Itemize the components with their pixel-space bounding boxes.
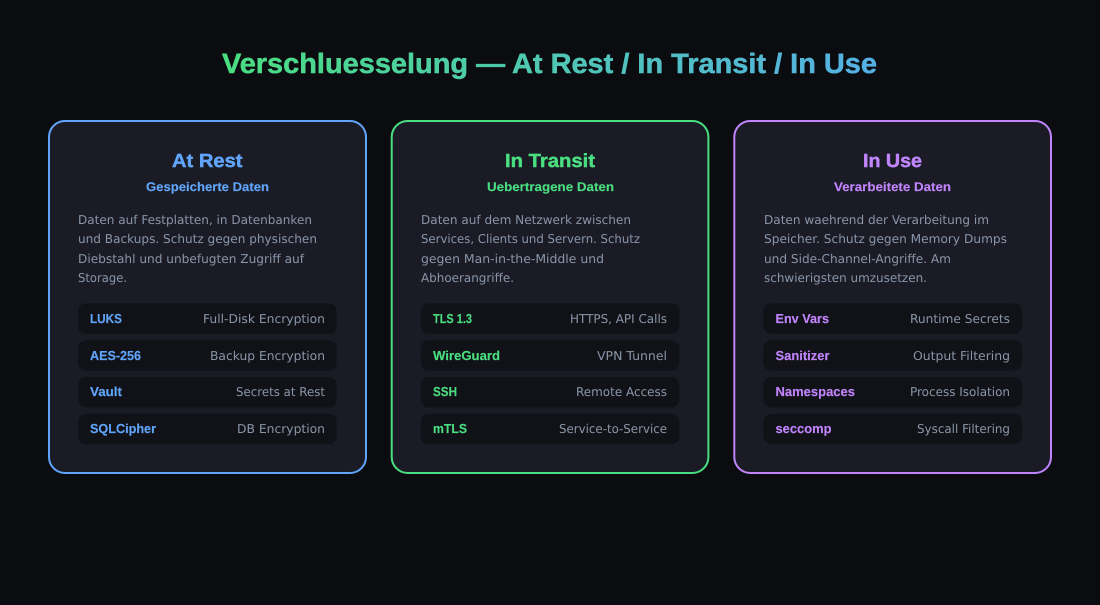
panel: In Transit — [392, 121, 708, 473]
row: Env Vars: Env Vars — [776, 311, 829, 326]
description: In Use: und Side-Channel-Angriffe. Am — [764, 252, 951, 266]
description: In Transit: Services, Clients und Servern. Schutz — [421, 232, 640, 246]
row: AES-256 — [78, 340, 337, 371]
row: seccomp — [763, 414, 1022, 444]
row: LUKS — [78, 303, 337, 334]
row: WireGuard — [421, 340, 679, 371]
row: mTLS: mTLS — [433, 421, 467, 436]
title: Verschluesselung — At Rest / In Transit / In Use — [222, 48, 877, 79]
description: At Rest: Storage. — [78, 271, 127, 285]
row: Sanitizer: Output Filtering — [913, 349, 1010, 363]
subheading: Gespeicherte Daten: Gespeicherte Daten — [146, 180, 269, 194]
row: SSH: SSH — [433, 384, 457, 399]
panel: In Use — [734, 121, 1051, 473]
row: SSH — [421, 377, 679, 407]
row: Env Vars — [763, 303, 1022, 334]
row: mTLS: Service-to-Service — [559, 422, 667, 436]
row: SQLCipher: SQLCipher — [90, 421, 156, 436]
subheading: Verarbeitete Daten: Verarbeitete Daten — [834, 180, 951, 194]
row: Namespaces: Namespaces — [776, 384, 855, 399]
row: Sanitizer — [763, 340, 1022, 371]
card: In Use — [734, 121, 1051, 473]
description: At Rest — [78, 213, 317, 285]
description: In Use — [764, 213, 1007, 285]
row: LUKS: LUKS — [90, 311, 122, 326]
description: In Transit — [421, 213, 640, 285]
row: Env Vars: Runtime Secrets — [910, 312, 1010, 326]
row: Vault: Secrets at Rest — [236, 385, 325, 399]
row: Vault: Vault — [90, 384, 123, 399]
row: SQLCipher: DB Encryption — [237, 422, 325, 436]
row: mTLS — [421, 414, 679, 444]
row: WireGuard: VPN Tunnel — [597, 349, 667, 363]
row: TLS 1.3 — [421, 303, 679, 334]
row: LUKS: Full-Disk Encryption — [203, 312, 325, 326]
description: In Use: Speicher. Schutz gegen Memory Dumps — [764, 232, 1007, 246]
description: In Transit: Abhoerangriffe. — [421, 271, 514, 285]
row: seccomp: Syscall Filtering — [917, 422, 1010, 436]
row: Vault — [78, 377, 337, 407]
heading: In Use: In Use — [863, 151, 922, 172]
row: SSH: Remote Access — [576, 385, 667, 399]
row: WireGuard: WireGuard — [433, 348, 500, 363]
row: AES-256: AES-256 — [90, 348, 141, 363]
subheading: Uebertragene Daten: Uebertragene Daten — [487, 180, 614, 194]
description: At Rest: und Backups. Schutz gegen physischen — [78, 232, 317, 246]
row: TLS 1.3: TLS 1.3 — [433, 311, 472, 326]
description: In Transit: gegen Man-in-the-Middle und — [421, 252, 604, 266]
row: seccomp: seccomp — [776, 421, 832, 436]
description: At Rest: Diebstahl und unbefugten Zugriff auf — [78, 252, 305, 266]
row: TLS 1.3: HTTPS, API Calls — [570, 312, 667, 326]
row: SQLCipher — [78, 414, 337, 444]
row: Sanitizer: Sanitizer — [776, 348, 830, 363]
card: At Rest — [49, 121, 366, 473]
description: At Rest: Daten auf Festplatten, in Datenbanken — [78, 213, 312, 227]
heading: In Transit: In Transit — [505, 151, 596, 172]
description: In Use: Daten waehrend der Verarbeitung im — [764, 213, 989, 227]
panel: At Rest — [49, 121, 366, 473]
description: In Transit: Daten auf dem Netzwerk zwischen — [421, 213, 631, 227]
row: Namespaces — [763, 377, 1022, 407]
heading: At Rest: At Rest — [172, 151, 243, 172]
card: In Transit — [392, 121, 708, 473]
row: Namespaces: Process Isolation — [910, 385, 1010, 399]
description: In Use: schwierigsten umzusetzen. — [764, 271, 927, 285]
row: AES-256: Backup Encryption — [210, 349, 325, 363]
